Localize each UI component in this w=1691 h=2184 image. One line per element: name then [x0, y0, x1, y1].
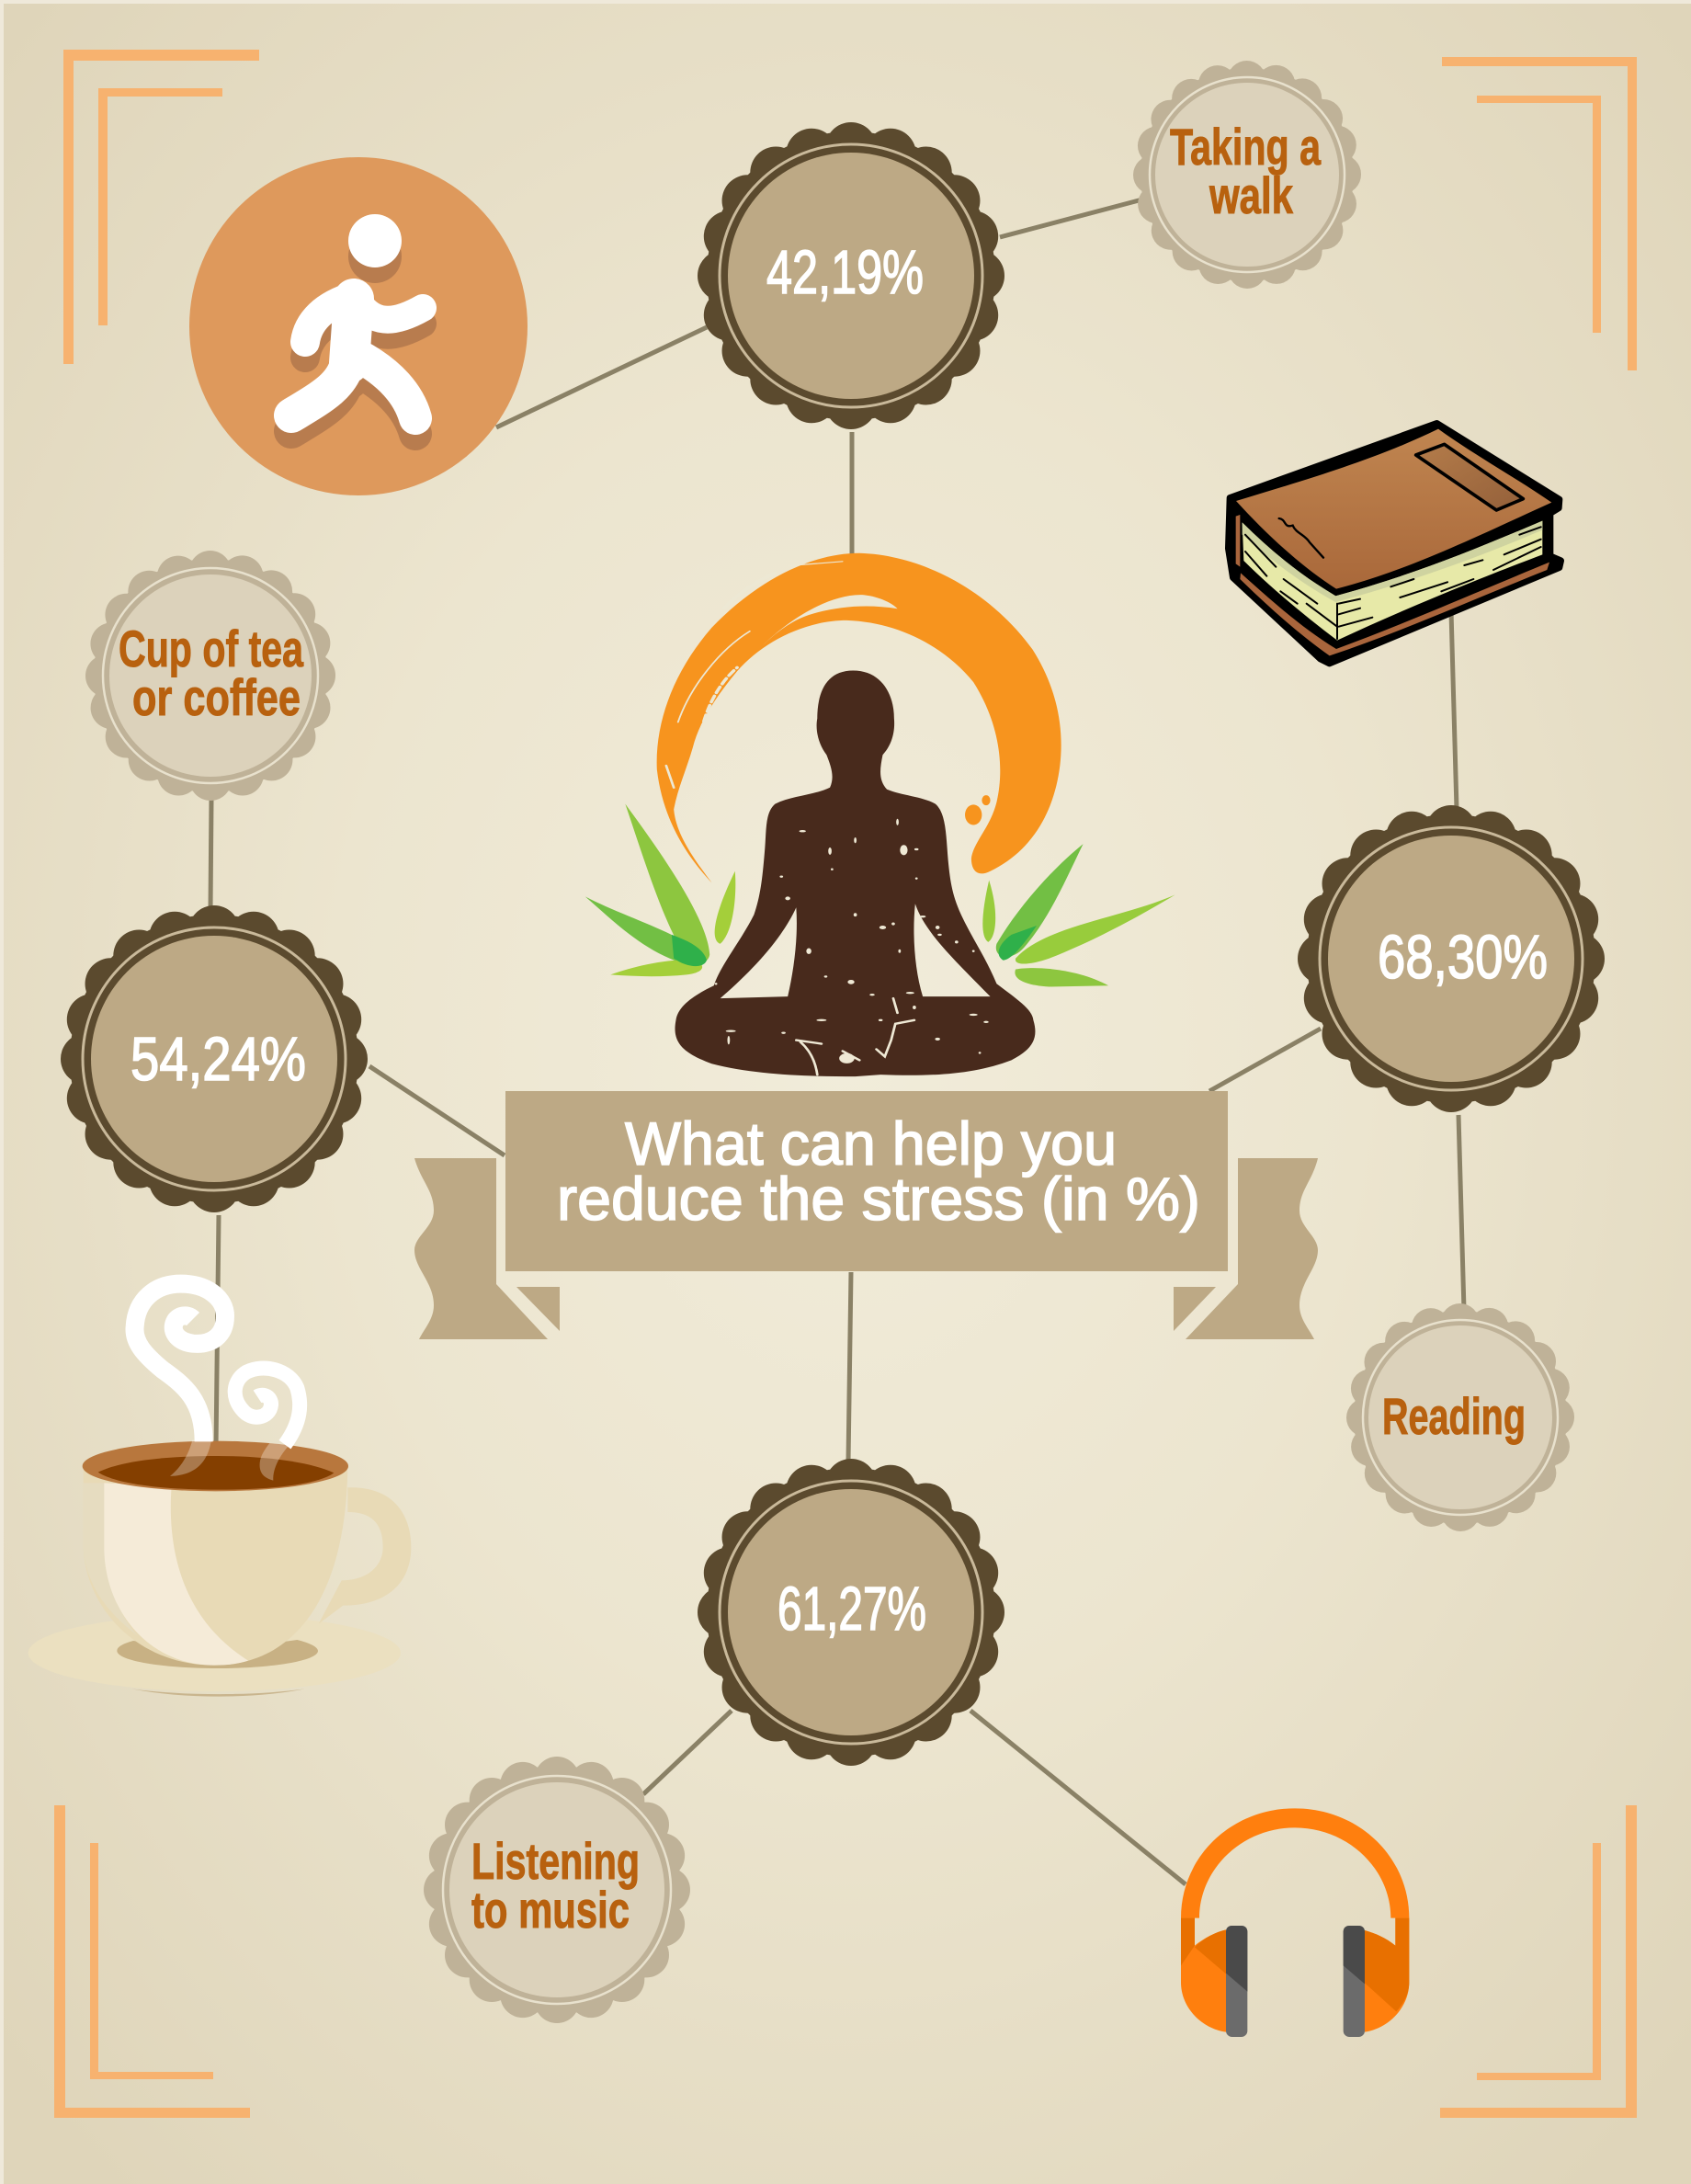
badge: 54,24% — [70, 915, 358, 1203]
title — [557, 1109, 1200, 1233]
badge: Reading — [1354, 1311, 1567, 1524]
walking person shadow — [291, 230, 423, 434]
badge: Taking a walk: walk — [1209, 166, 1294, 224]
left ear cup — [1181, 1918, 1226, 2032]
right pad — [1344, 1926, 1365, 2037]
title: What can help you — [625, 1109, 1117, 1177]
corner bracket: bottom right — [1440, 1805, 1637, 2118]
badge: 61,27%: 61,27% — [777, 1575, 926, 1644]
badge: Taking a walk — [1141, 68, 1354, 281]
rim and coffee — [83, 1441, 348, 1491]
walking person figure — [291, 214, 423, 418]
right ear cup — [1365, 1918, 1409, 2032]
badge: 61,27% — [707, 1468, 995, 1757]
icon: headphones — [1181, 1808, 1409, 2037]
badge: Listening to music — [433, 1766, 681, 2014]
icon: walking person — [189, 157, 528, 495]
title ribbon — [414, 1091, 1318, 1339]
silhouette — [675, 670, 1035, 1076]
icon: book — [1229, 424, 1560, 664]
badge: Reading: Reading — [1382, 1387, 1526, 1445]
silhouette speckles — [715, 819, 989, 1075]
badge: Cup of tea or coffee: or coffee — [132, 668, 301, 726]
title: reduce the stress (in %) — [557, 1165, 1200, 1233]
enso brush circle — [657, 553, 1061, 882]
handle — [319, 1487, 411, 1624]
leaves right — [1016, 894, 1175, 964]
icon: meditation figure — [585, 553, 1175, 1076]
badge: 42,19% — [707, 131, 995, 420]
saucer — [28, 1615, 401, 1691]
leaves left — [625, 804, 709, 962]
badge: Listening to music: to music — [471, 1881, 630, 1939]
corner bracket: top right — [1442, 57, 1637, 370]
icon: coffee cup — [28, 1284, 411, 1697]
badge: 54,24%: 54,24% — [131, 1025, 306, 1094]
left pad — [1226, 1926, 1247, 2037]
badge: 68,30%: 68,30% — [1378, 923, 1548, 992]
corner bracket: bottom left — [54, 1805, 250, 2118]
steam — [135, 1284, 225, 1441]
badge: Taking a walk: Taking a — [1170, 118, 1322, 176]
ribbon left tail — [414, 1158, 548, 1339]
body — [84, 1466, 347, 1666]
badge: Listening to music: Listening — [471, 1832, 640, 1890]
ribbon right tail — [1186, 1158, 1318, 1339]
corner bracket: top left — [63, 50, 259, 364]
connector lines — [210, 199, 1464, 1884]
badge: Cup of tea or coffee — [94, 559, 327, 792]
badge: Cup of tea or coffee: Cup of tea — [119, 620, 304, 677]
badge: 68,30% — [1307, 814, 1595, 1103]
enso brush streaks — [763, 595, 898, 646]
headband — [1181, 1808, 1409, 1918]
ribbon main panel — [505, 1091, 1228, 1271]
badge: 42,19%: 42,19% — [766, 238, 924, 307]
